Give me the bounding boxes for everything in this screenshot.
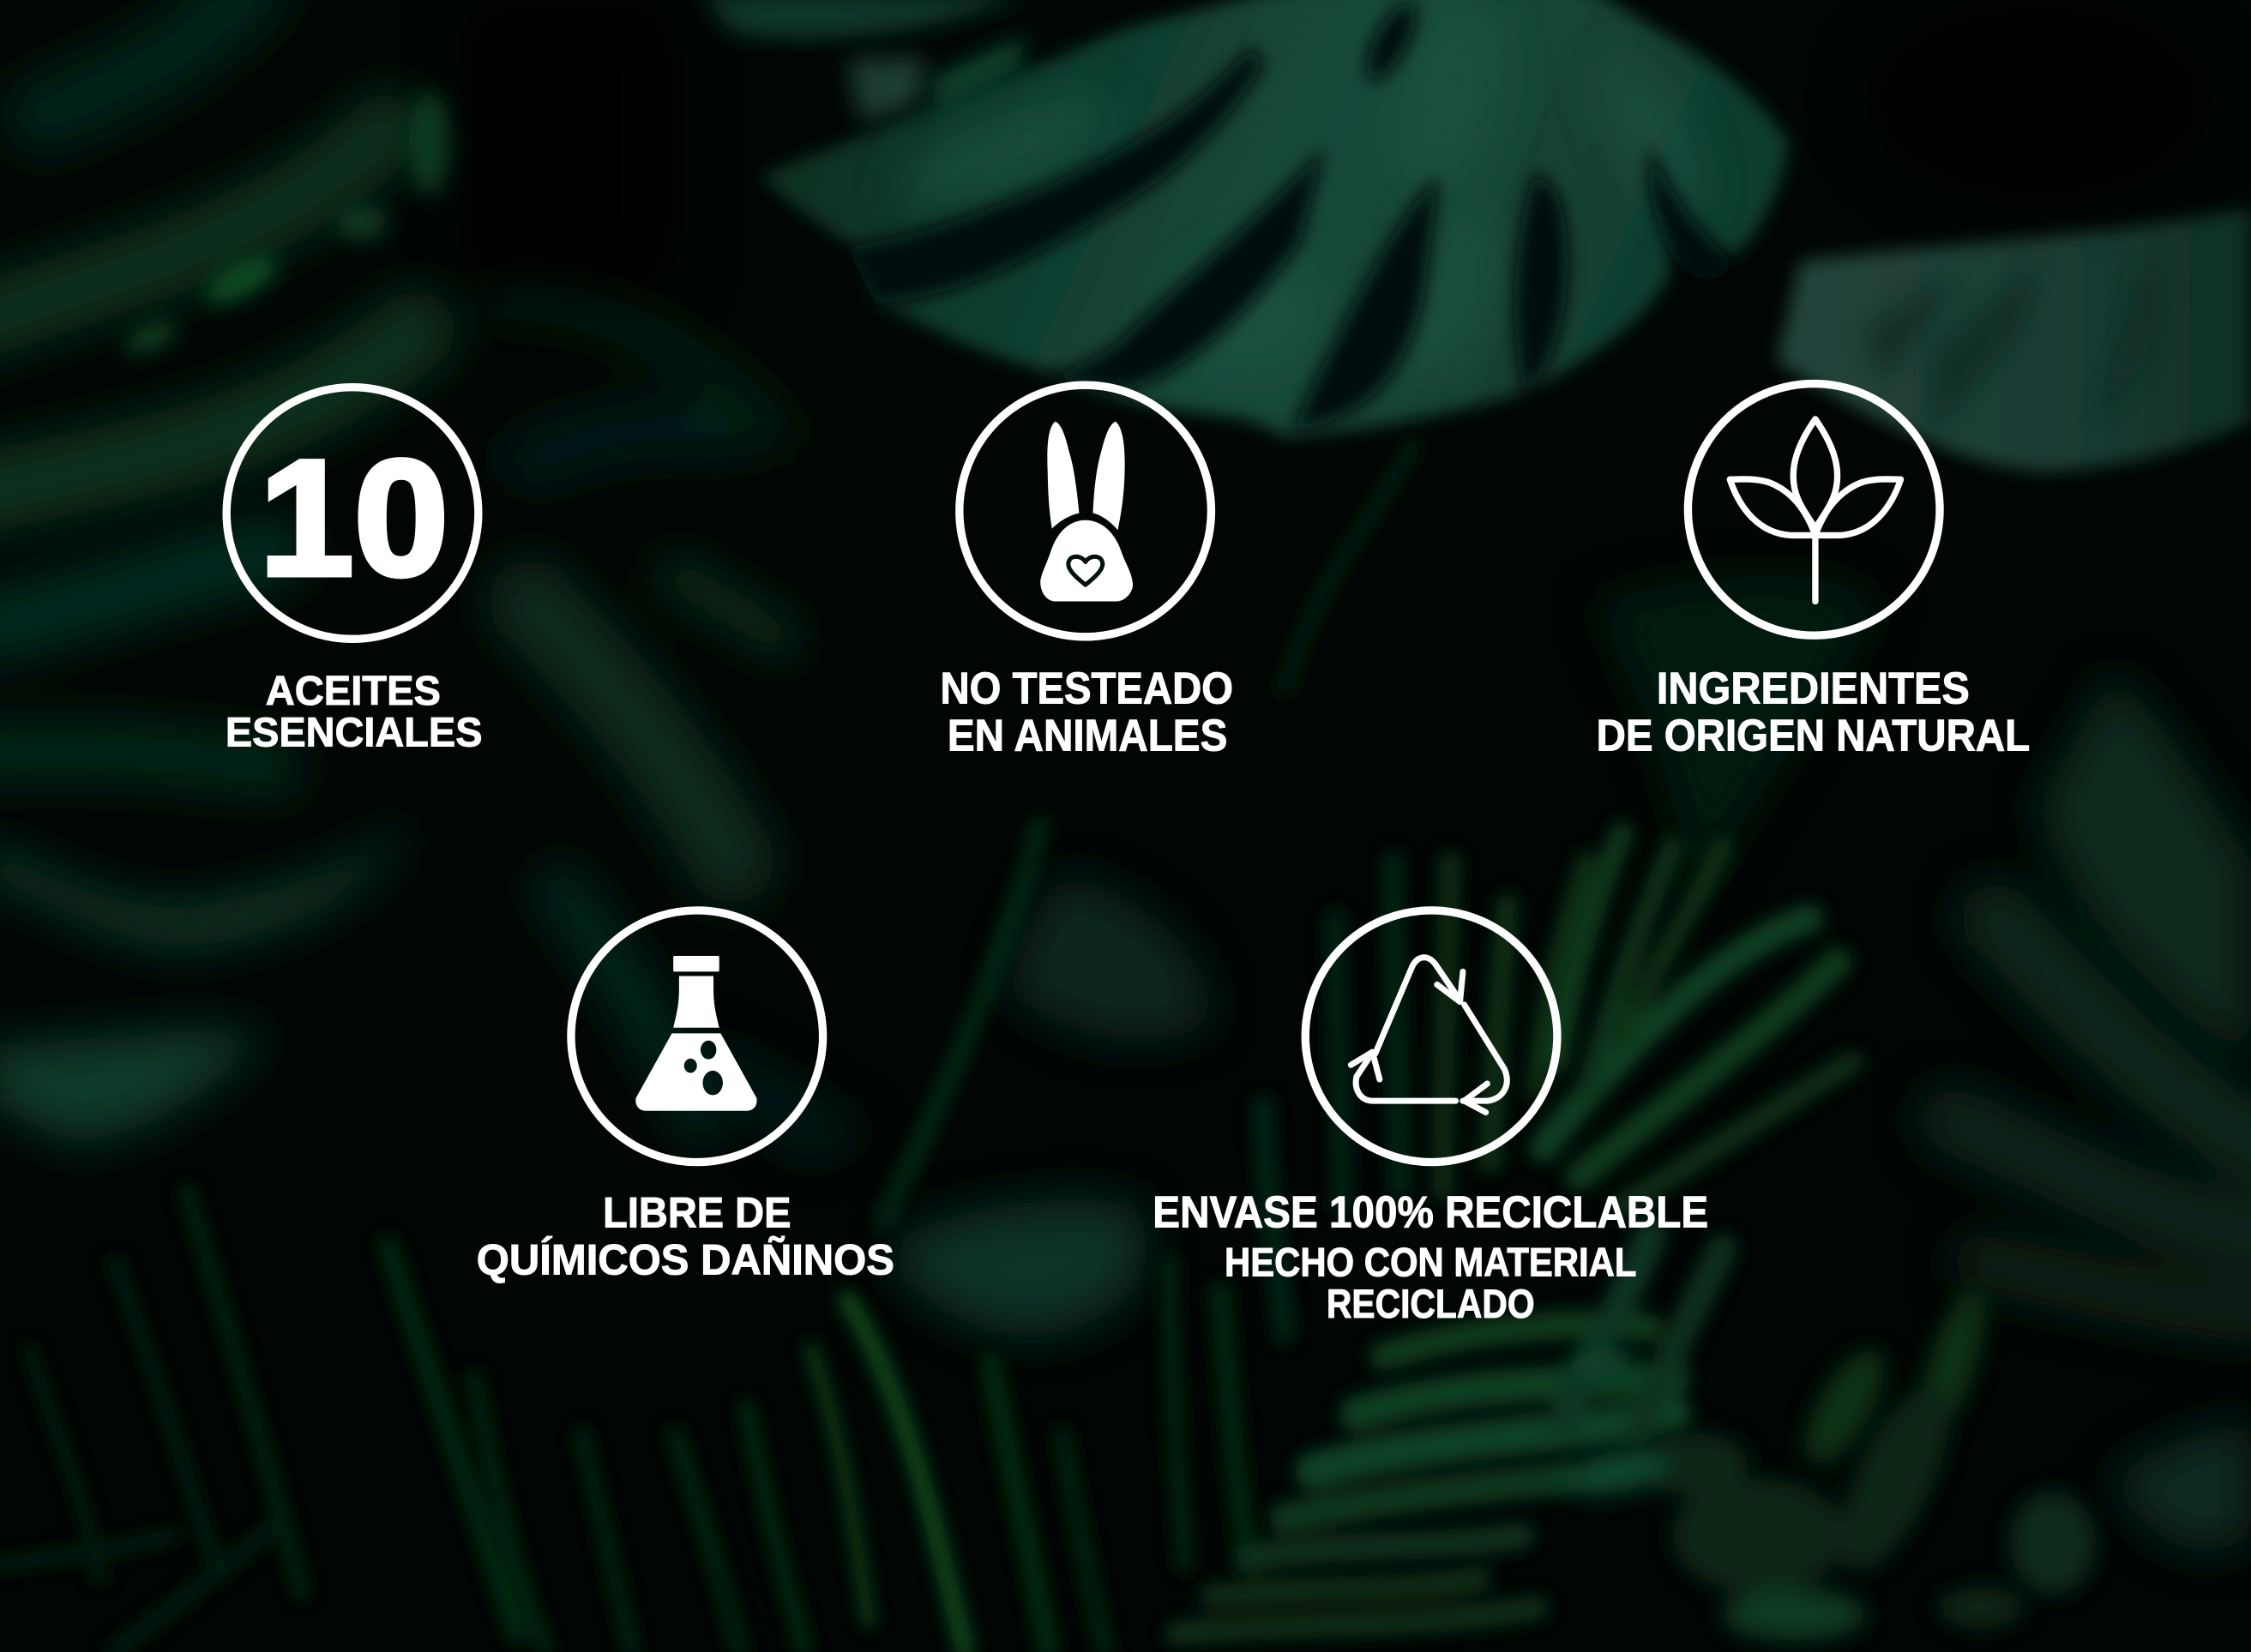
label: DE ORIGEN NATURAL xyxy=(1597,711,2030,760)
label xyxy=(226,668,482,756)
background: right side foliage xyxy=(1593,575,2251,1550)
background: center lower leaves xyxy=(689,875,1213,1336)
label xyxy=(941,663,1233,760)
label: ESENCIALES xyxy=(226,710,482,756)
label: INGREDIENTES xyxy=(1657,663,1970,712)
icon: recycling triangle xyxy=(1351,958,1507,1112)
badge circle xyxy=(960,385,1211,637)
label xyxy=(477,1188,894,1284)
background: soft shade on dark centre xyxy=(466,0,2211,287)
icon: rabbit xyxy=(1040,422,1133,602)
badge circle xyxy=(1305,910,1557,1162)
label: subline: HECHO CON MATERIAL xyxy=(1225,1240,1636,1284)
background: fern leaves lower right xyxy=(1561,1282,2096,1641)
icon: plant xyxy=(1730,419,1901,602)
label: subline xyxy=(1225,1240,1636,1326)
grey glint on the leaf tip xyxy=(847,57,926,122)
feature: ingredientes de origen natural xyxy=(1597,384,2030,760)
background: left lit leaves xyxy=(0,818,409,1141)
badge circle xyxy=(226,387,478,639)
dark slits xyxy=(847,0,1734,430)
highlights xyxy=(886,0,1719,390)
label: QUÍMICOS DAÑINOS xyxy=(477,1236,894,1284)
background: large monstera leaf xyxy=(701,0,1789,436)
label: ACEITES xyxy=(266,668,441,714)
label: subline: RECICLADO xyxy=(1327,1282,1535,1326)
label: headline: ENVASE 100% RECICLABLE xyxy=(1153,1186,1708,1236)
feature: libre de químicos dañinos xyxy=(477,910,894,1284)
badge circle xyxy=(1688,384,1940,635)
background: palm frond lower centre xyxy=(1177,1234,1723,1633)
feature: envase 100% reciclable xyxy=(1153,910,1708,1326)
feature: 10 aceites esenciales xyxy=(226,387,482,756)
background: bright green glints xyxy=(120,92,452,360)
number 10: 10 xyxy=(259,426,448,610)
label: LIBRE DE xyxy=(603,1188,791,1236)
label: NO TESTEADO xyxy=(941,663,1233,712)
feature: no testeado en animales xyxy=(941,385,1233,760)
background: center dark green stems xyxy=(883,445,1414,1220)
label: EN ANIMALES xyxy=(948,711,1227,760)
background: palm frond behind recycling icon xyxy=(1170,832,1852,1565)
background: palm stripes lower left xyxy=(0,1192,1105,1650)
icon: flask xyxy=(635,956,757,1111)
label xyxy=(1597,663,2030,760)
top rim lobe xyxy=(701,0,1026,38)
background: top left monstera bands xyxy=(0,0,782,1120)
badge circle xyxy=(571,910,823,1162)
background: right leaf xyxy=(1778,208,2251,471)
